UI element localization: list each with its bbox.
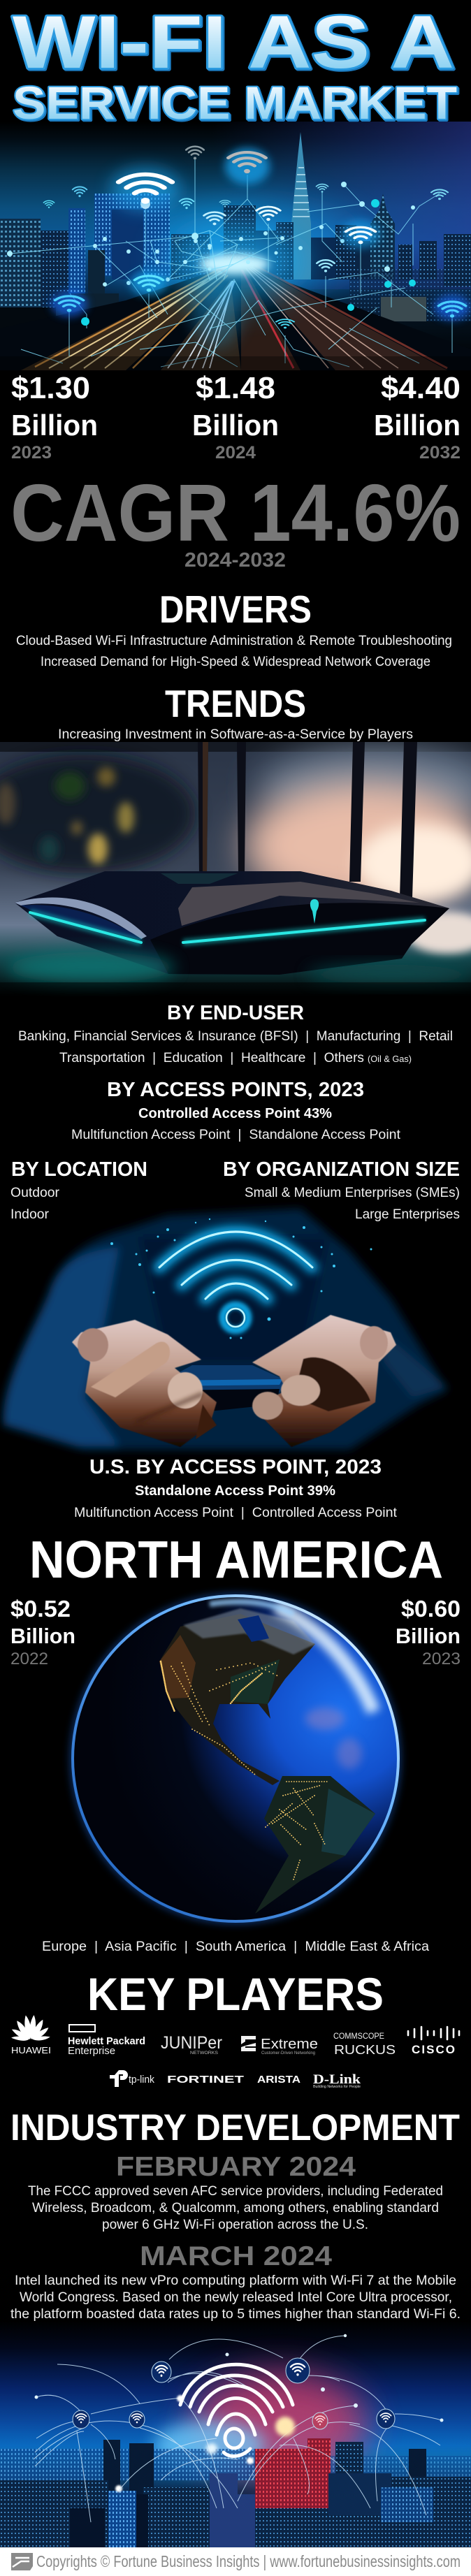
u.s. by access point — [74, 1456, 398, 1520]
north america 2022 value: Billion — [10, 1624, 75, 1648]
north america 2022 value: 2022 — [10, 1650, 48, 1668]
logo: huawei: HUAWEI — [11, 2045, 51, 2055]
by location: Indoor — [10, 1207, 50, 1222]
development: march 2024: World Congress. Based on the newly released Intel Core Ultra processor, — [20, 2290, 452, 2305]
development: february 2024: power 6 GHz Wi-Fi operation across the U.S. — [102, 2218, 368, 2232]
logo: cisco — [408, 2027, 459, 2056]
logo: tp-link — [110, 2070, 154, 2087]
by access points: Controlled Access Point 43% — [138, 1106, 332, 1121]
central glow — [164, 224, 304, 346]
logo: extreme networks: Customer-Driven Networking — [261, 2051, 315, 2055]
by organization size: Large Enterprises — [355, 1207, 460, 1222]
logo: commscope ruckus — [333, 2031, 396, 2057]
particles — [110, 1218, 372, 1339]
logo: juniper networks: NETWORKS — [190, 2051, 218, 2055]
logo: juniper networks: JUNIPer — [161, 2033, 222, 2053]
north america 2023 value: 2023 — [422, 1650, 461, 1668]
development: february 2024: FEBRUARY 2024 — [116, 2152, 356, 2182]
nodes — [35, 2334, 443, 2422]
logo: huawei — [11, 2015, 51, 2055]
title: SERVICE MARKET — [13, 77, 457, 129]
u.s. by access point: Standalone Access Point 39% — [135, 1483, 335, 1499]
market size: 2024: 2024 — [215, 443, 256, 463]
antennas — [198, 742, 417, 898]
logo: fortinet: FORTINET — [167, 2074, 244, 2086]
trends: Increasing Investment in Software-as-a-Service by Players — [58, 727, 413, 742]
logo: d-link: D-Link — [313, 2072, 361, 2087]
router body — [15, 871, 449, 975]
ground — [56, 270, 471, 370]
drivers — [16, 588, 452, 669]
drivers: Cloud-Based Wi-Fi Infrastructure Administration & Remote Troubleshooting — [16, 634, 452, 648]
small wi-fi badges — [73, 2358, 395, 2429]
u.s. by access point: U.S. BY ACCESS POINT, 2023 — [89, 1456, 382, 1478]
title — [13, 0, 457, 129]
logo: hewlett packard enterprise: Enterprise — [68, 2045, 115, 2057]
by organization size: Small & Medium Enterprises (SMEs) — [245, 1186, 460, 1200]
market size: 2024: $1.48 — [196, 371, 275, 405]
market size: 2024 — [192, 371, 279, 463]
footer — [0, 2547, 471, 2576]
key players heading: KEY PLAYERS — [87, 1968, 384, 2020]
south america — [255, 1776, 375, 1914]
north america heading: NORTH AMERICA — [29, 1530, 443, 1589]
image: earth globe — [71, 1594, 400, 1923]
north america 2023 value: Billion — [396, 1624, 461, 1648]
development: march 2024: MARCH 2024 — [140, 2241, 332, 2271]
market size: 2023 — [11, 371, 98, 463]
canada snow and clouds — [183, 1608, 315, 1654]
buildings — [103, 2440, 426, 2494]
logo: extreme networks: Extreme — [261, 2037, 318, 2052]
logo: hewlett packard enterprise — [68, 2025, 145, 2057]
left hand — [72, 1320, 217, 1447]
development: february 2024: The FCCC approved seven AFC service providers, including Federated — [28, 2184, 443, 2199]
market size: 2023: $1.30 — [11, 371, 90, 405]
by end-user: Transportation | Education | Healthcare | Others — [59, 1051, 364, 1065]
by end-user: (Oil & Gas) — [368, 1054, 412, 1064]
by end-user: Banking, Financial Services & Insurance (BFSI) | Manufacturing | Retail — [18, 1029, 453, 1044]
by access points — [71, 1079, 401, 1142]
network lines — [10, 159, 452, 367]
drivers: Increased Demand for High-Speed & Widespread Network Coverage — [41, 655, 430, 669]
north america 2022 value — [10, 1596, 75, 1668]
trends: TRENDS — [165, 682, 306, 725]
image: wi-fi router — [0, 742, 471, 996]
logo: cisco: CISCO — [412, 2043, 455, 2056]
north america 2022 value: $0.52 — [10, 1596, 71, 1622]
phone — [157, 1365, 285, 1397]
development: february 2024 — [28, 2152, 443, 2232]
by location — [10, 1158, 147, 1222]
market size: 2024: Billion — [192, 409, 279, 442]
market size: 2023: Billion — [11, 409, 98, 442]
market size: 2032 — [374, 371, 461, 463]
other regions: Europe | Asia Pacific | South America | Middle East & Africa — [42, 1940, 429, 1954]
CAGR: 2024-2032 — [184, 549, 286, 572]
by location: Outdoor — [10, 1186, 60, 1200]
by end-user — [18, 1002, 453, 1065]
market size: 2023: 2023 — [11, 443, 52, 463]
logo: extreme networks — [241, 2036, 318, 2055]
logo: hewlett packard enterprise: Hewlett Packard — [68, 2035, 145, 2047]
network curves — [34, 2336, 442, 2522]
north america — [159, 1614, 315, 1785]
trends — [58, 682, 413, 742]
development: february 2024: Wireless, Broadcom, & Qualcomm, among others, enabling standard — [32, 2201, 439, 2215]
by access points: Multifunction Access Point | Standalone Access Point — [71, 1128, 401, 1142]
u.s. by access point: Multifunction Access Point | Controlled Access Point — [74, 1506, 398, 1520]
network nodes — [7, 182, 416, 326]
development: march 2024 — [10, 2241, 461, 2322]
logo: d-link: Building Networks for People — [313, 2085, 361, 2089]
by end-user: BY END-USER — [167, 1002, 304, 1024]
logo: tp-link: tp-link — [129, 2074, 154, 2086]
tall tower — [291, 132, 311, 279]
cyan light strips — [30, 899, 425, 943]
title: WI-FI AS A — [13, 0, 454, 84]
by organization size: BY ORGANIZATION SIZE — [223, 1158, 460, 1181]
image: hands holding phone with wi-fi — [3, 1209, 447, 1450]
development: march 2024: Intel launched its new vPro computing platform with Wi-Fi 7 at the Mobile — [15, 2273, 456, 2288]
drivers: DRIVERS — [159, 588, 312, 631]
wifi icons — [43, 147, 470, 328]
panel: hero city image — [0, 122, 471, 370]
logo: arista: ARISTA — [257, 2074, 300, 2086]
big wi-fi symbol — [180, 2364, 293, 2456]
roads — [21, 269, 228, 370]
market size: 2032: Billion — [374, 409, 461, 442]
by organization size — [223, 1158, 460, 1222]
wi-fi glow arcs — [159, 1232, 312, 1330]
by location: BY LOCATION — [11, 1158, 147, 1181]
by access points: BY ACCESS POINTS, 2023 — [107, 1079, 364, 1101]
city lights — [161, 1661, 328, 1879]
image: connected city skyline — [0, 2321, 471, 2547]
market size: 2032: $4.40 — [381, 371, 461, 405]
north america 2023 value — [396, 1596, 461, 1668]
logo: commscope ruckus: COMMSCOPE — [333, 2031, 384, 2041]
logo: commscope ruckus: RUCKUS — [334, 2043, 396, 2057]
right hand — [252, 1315, 396, 1447]
development: march 2024: the platform boasted data rates up to 5 times higher than standard Wi-Fi 6. — [10, 2307, 461, 2322]
north america 2023 value: $0.60 — [401, 1596, 461, 1622]
market size: 2032: 2032 — [419, 443, 461, 463]
logo: fortune business insights — [11, 2553, 33, 2570]
